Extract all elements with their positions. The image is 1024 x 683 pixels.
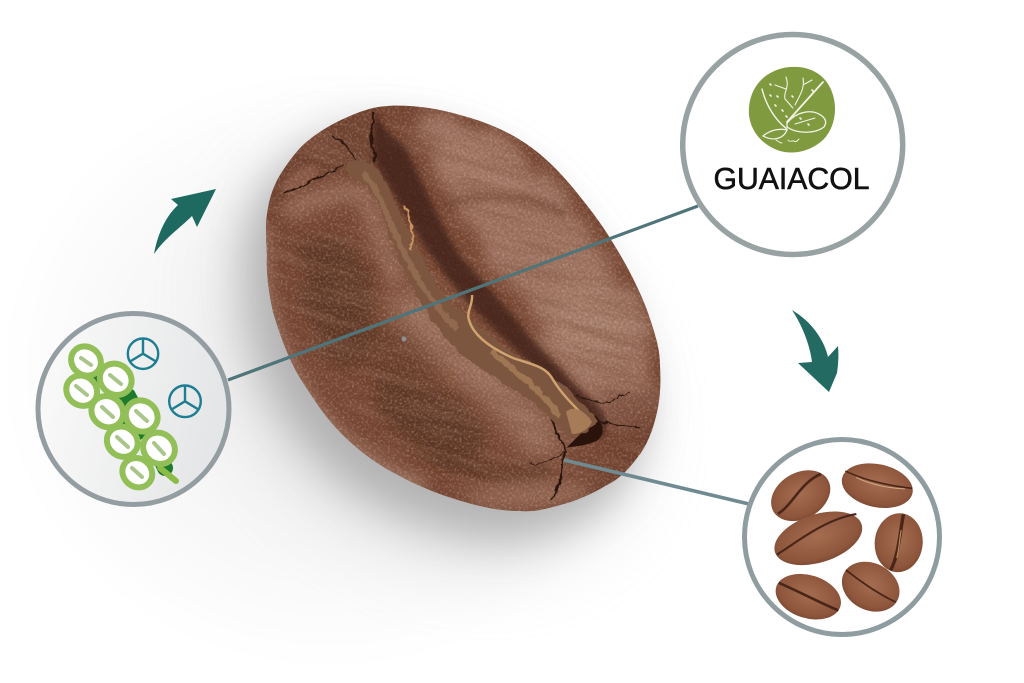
icon: molecule symbol two (169, 386, 201, 417)
right lobe lower sheen (544, 281, 636, 369)
ring (683, 34, 903, 254)
central crease (345, 161, 598, 436)
panel: guaiacol (683, 34, 903, 254)
cracks (283, 113, 640, 500)
connector line: bean to roasted beans (564, 460, 749, 504)
tip highlight (467, 476, 593, 514)
dark fold beside crease (373, 112, 606, 440)
arrow: down right (792, 310, 838, 392)
main coffee bean (266, 106, 660, 512)
small dot on bean (402, 336, 406, 342)
arrow: up right (154, 189, 216, 254)
small bean four (872, 511, 925, 574)
background haze (0, 70, 660, 670)
left lobe ridge highlight (400, 295, 552, 452)
small bean two (838, 457, 917, 514)
left lobe dark patches (294, 233, 377, 369)
dark hollow at bean tip (566, 408, 603, 448)
small bean one (762, 460, 839, 531)
label: guaiacol: GUAIACOL (714, 161, 870, 196)
right lobe streak shading (445, 196, 565, 215)
small bean six (833, 552, 908, 621)
right lobe highlight (418, 112, 655, 427)
right lobe upper sheen (426, 144, 458, 195)
left lobe rim highlight (266, 220, 431, 490)
connector line: guaiacol to green beans (228, 206, 698, 380)
bean cast shadow (236, 132, 642, 561)
icon: green bean cluster (60, 340, 181, 493)
ring (38, 314, 229, 504)
right lobe lower dark edge (600, 385, 660, 440)
crease tip fold (566, 409, 592, 434)
tan membrane line (468, 295, 584, 416)
small bean five (770, 566, 847, 627)
small bean three (768, 501, 869, 575)
panel: green coffee beans (38, 314, 229, 504)
left lobe upper highlight (285, 193, 398, 280)
top left fold (370, 157, 371, 158)
grain texture (260, 100, 665, 520)
streak texture (268, 126, 660, 500)
icon: molecule symbol one (128, 338, 158, 369)
bottom dark band (425, 448, 548, 475)
ring (744, 440, 940, 634)
infographic canvas (36, 32, 942, 637)
icon: guaiacol leaf badge (749, 67, 835, 153)
panel: roasted coffee beans (744, 440, 940, 634)
